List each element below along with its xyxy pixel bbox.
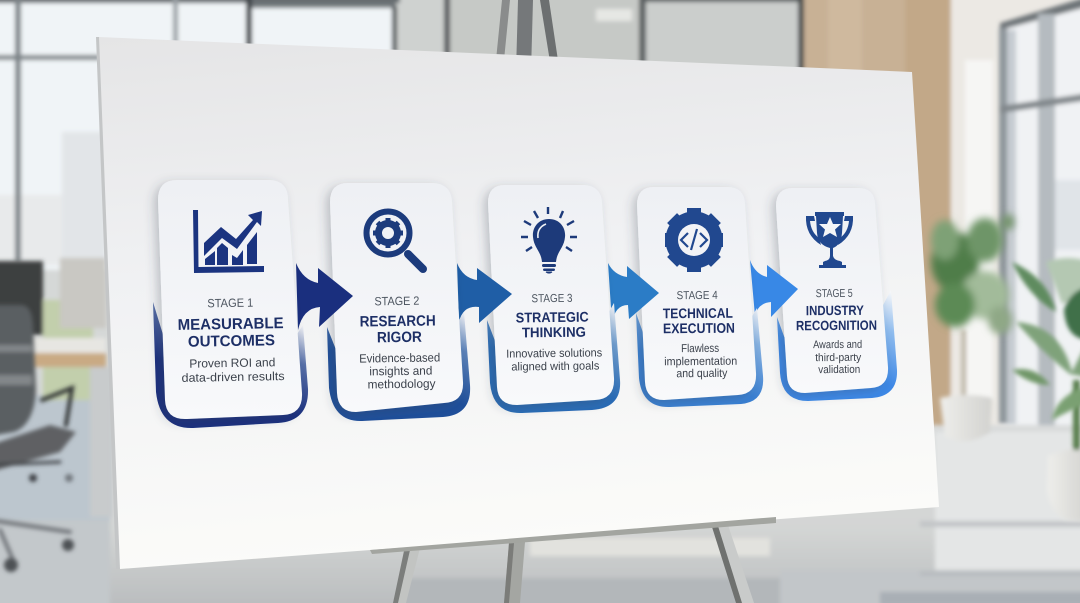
stage 5 card: [776, 188, 897, 401]
stage 5 text: Awards and: [813, 339, 862, 351]
stage 4 white panel: [637, 187, 756, 400]
stage 3 gradient border: [487, 303, 620, 413]
stage 4 text: Flawless: [681, 343, 719, 355]
arrow 2: [457, 263, 512, 323]
stage 3 text: [505, 292, 603, 374]
stage 3 card: [487, 185, 620, 413]
stage 5 white panel: [776, 188, 888, 393]
stage 2 white panel: [330, 183, 463, 412]
floor: [0, 395, 1080, 603]
arrow 4: [750, 260, 798, 317]
stage 4 text: and quality: [676, 368, 728, 380]
stage 3 text: aligned with goals: [511, 360, 600, 374]
stage 2 text: STAGE 2: [374, 294, 420, 308]
easel legs behind board: [393, 0, 754, 603]
stage 4 text: STAGE 4: [677, 290, 718, 302]
stage 3 text: THINKING: [522, 324, 586, 340]
icon: magnifier with gear: [366, 212, 423, 269]
icon: trophy: [806, 212, 853, 268]
arrow 3: [608, 263, 659, 323]
stage 1 gradient border: [153, 302, 308, 428]
stage 3 text: STAGE 3: [531, 293, 573, 305]
stage 2 text: insights and: [369, 364, 432, 378]
stage 2 gradient border: [327, 312, 470, 421]
stage 4 text: [663, 290, 737, 380]
stage 1 text: MEASURABLE: [178, 315, 284, 334]
easel ledge: [370, 517, 776, 554]
stage 4 text: EXECUTION: [663, 320, 735, 336]
stage 5 text: validation: [818, 364, 860, 376]
stage 1 text: data-driven results: [181, 369, 285, 385]
stage 5 text: STAGE 5: [816, 288, 853, 300]
stage 2 text: [358, 293, 441, 392]
stage 5 text: third-party: [815, 352, 862, 364]
stage 5 text: RECOGNITION: [796, 318, 877, 333]
stage 2 card: [327, 183, 470, 421]
stage 3 text: Innovative solutions: [506, 347, 602, 361]
presentation board: [96, 37, 939, 569]
stage 5 gradient border: [777, 290, 897, 401]
stage 1 white panel: [158, 180, 302, 419]
arrow 1: [296, 263, 353, 330]
stage 4 card: [636, 187, 763, 407]
stage 2 text: Evidence-based: [359, 350, 440, 366]
stage 2 text: methodology: [367, 377, 436, 391]
stage 1 text: [177, 295, 285, 385]
stage 1 text: STAGE 1: [207, 296, 254, 310]
plants: [931, 214, 1080, 522]
stage 3 white panel: [488, 185, 614, 405]
stage 5 text: [796, 288, 877, 376]
stage 4 gradient border: [636, 308, 763, 407]
right window: [965, 0, 1080, 448]
stage 4 text: TECHNICAL: [663, 305, 733, 321]
office chair: [0, 305, 76, 572]
stage 1 text: Proven ROI and: [189, 355, 275, 371]
stage 2 text: RIGOR: [377, 329, 422, 346]
icon: gear with code brackets: [665, 208, 723, 272]
icon: growth chart: [193, 210, 264, 273]
stage 1 text: OUTCOMES: [188, 332, 275, 351]
desk and monitors: [0, 258, 112, 517]
stage 5 text: INDUSTRY: [806, 303, 864, 318]
stage 2 text: RESEARCH: [360, 313, 436, 331]
stage 3 text: STRATEGIC: [516, 309, 589, 325]
stage 1 card: [153, 180, 308, 428]
stage 4 text: implementation: [664, 356, 737, 368]
icon: light bulb: [521, 207, 577, 273]
